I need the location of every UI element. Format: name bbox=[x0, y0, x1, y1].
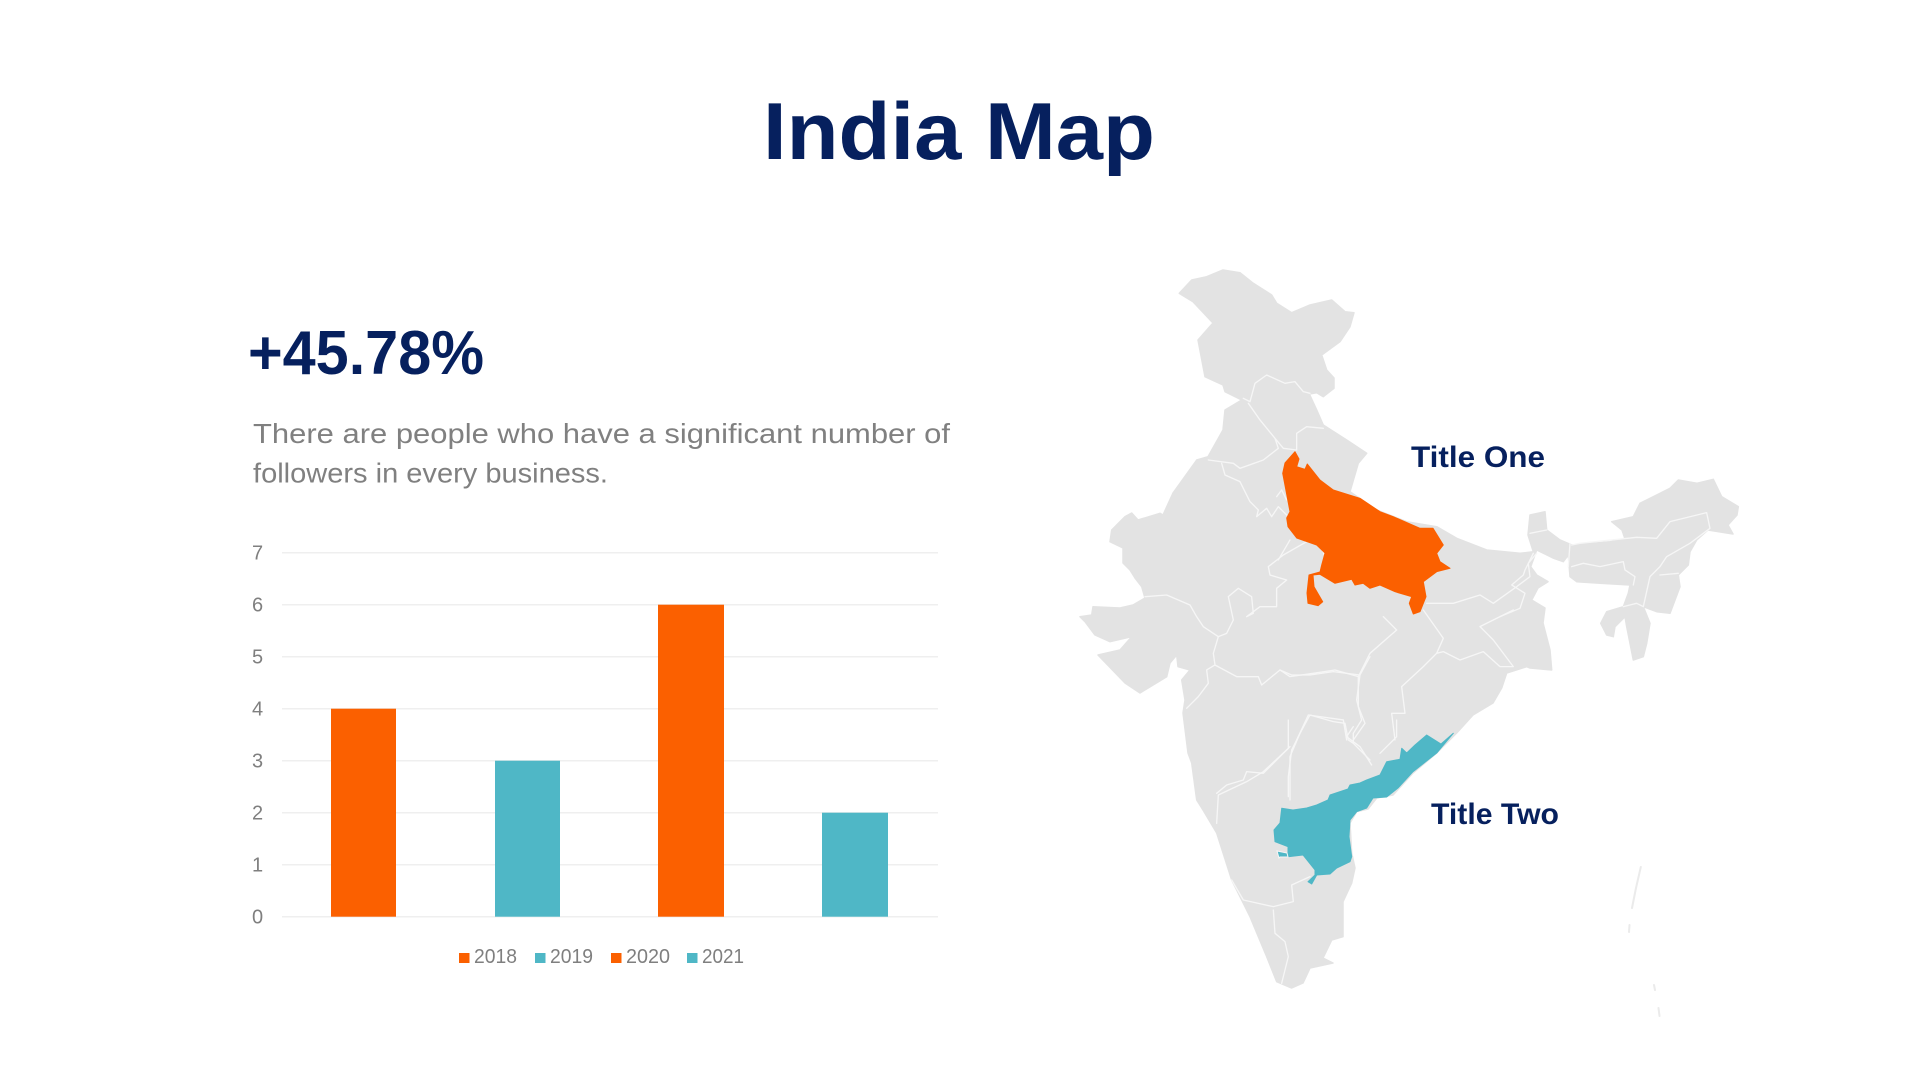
map: India land bbox=[1080, 270, 1738, 988]
y axis labels: 4 bbox=[252, 698, 263, 720]
bar: 2019 bbox=[495, 761, 560, 917]
map: Andaman and Nicobar islands bbox=[1629, 867, 1660, 1016]
legend: 2021 bbox=[702, 946, 744, 968]
map: state borders bbox=[1145, 375, 1710, 983]
title: India Map bbox=[763, 87, 1155, 177]
y axis labels bbox=[252, 542, 263, 928]
legend bbox=[459, 946, 744, 968]
y axis labels: 3 bbox=[252, 750, 263, 772]
y axis labels: 2 bbox=[252, 802, 263, 824]
label: Title Two: Title Two bbox=[1431, 798, 1559, 831]
bar: 2018 bbox=[331, 709, 396, 917]
stat: +45.78%: +45.78% bbox=[248, 319, 484, 388]
description text bbox=[253, 418, 950, 488]
legend: 2020 bbox=[626, 946, 670, 968]
y axis labels: 7 bbox=[252, 542, 263, 564]
description text: There are people who have a significant number of bbox=[253, 418, 950, 449]
bar: 2021 bbox=[822, 813, 888, 917]
legend: 2019 bbox=[550, 946, 593, 968]
y axis labels: 1 bbox=[252, 854, 263, 876]
y axis labels: 6 bbox=[252, 594, 263, 616]
description text: followers in every business. bbox=[253, 458, 608, 488]
India map bbox=[1080, 270, 1738, 1016]
bar: 2020 bbox=[658, 605, 724, 917]
y axis labels: 5 bbox=[252, 646, 263, 668]
y axis labels: 0 bbox=[252, 906, 263, 928]
map: Andhra Pradesh enclave bbox=[1277, 851, 1288, 858]
map: Andhra Pradesh highlight bbox=[1274, 733, 1453, 884]
legend: 2018 bbox=[474, 946, 517, 968]
bar chart bbox=[252, 542, 938, 968]
label: Title One: Title One bbox=[1411, 441, 1545, 474]
map: Uttar Pradesh highlight bbox=[1283, 452, 1450, 614]
